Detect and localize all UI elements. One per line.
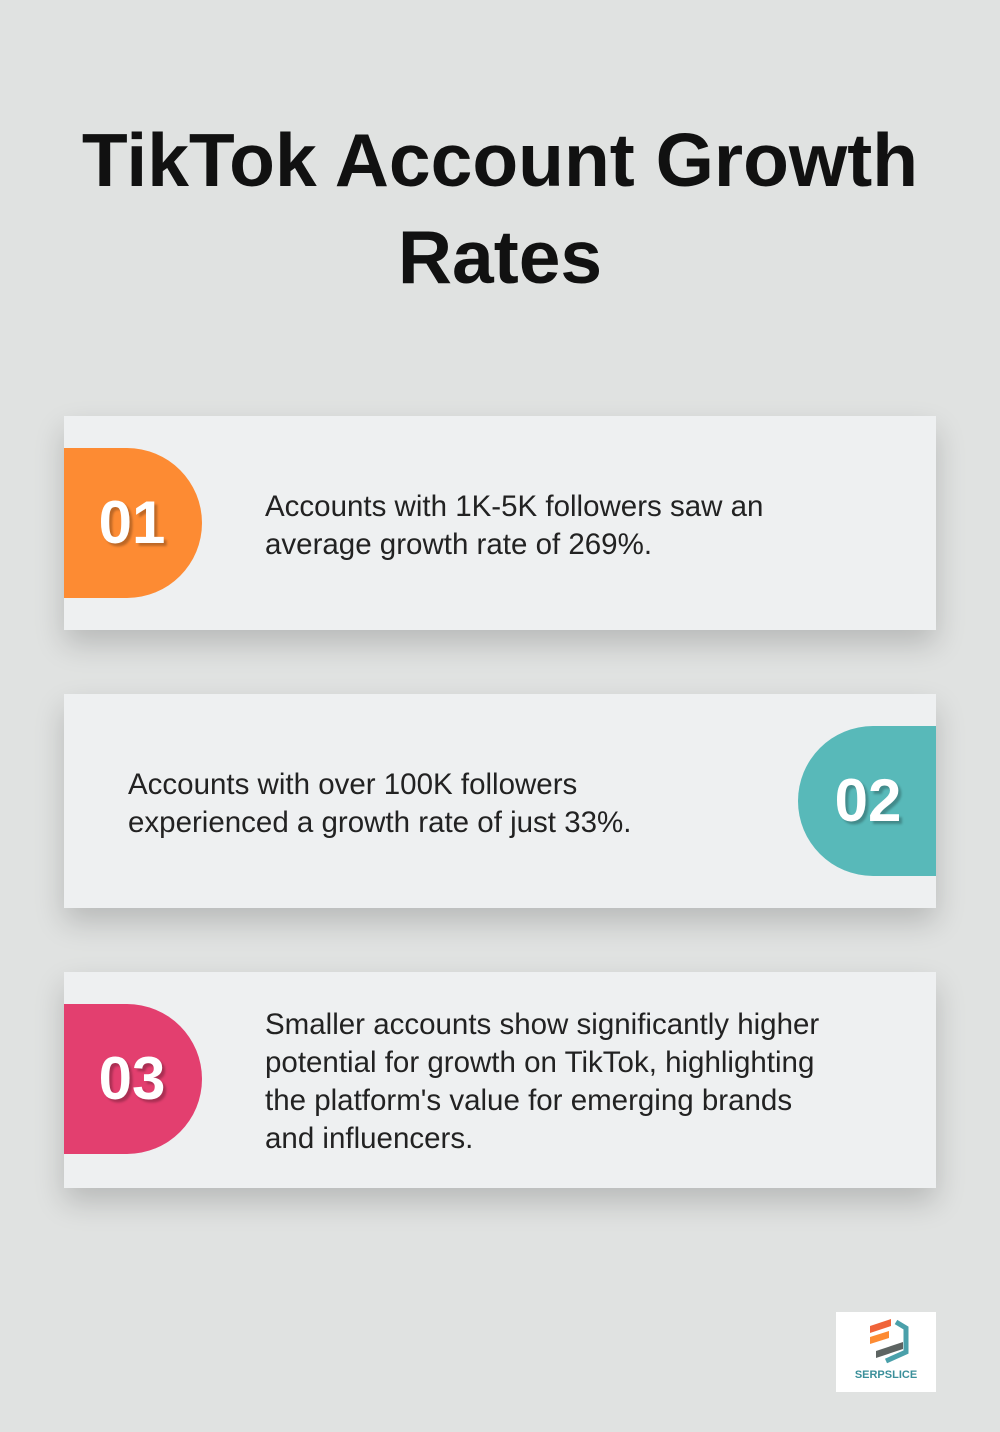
text 2: Accounts with over 100K followers experienced a growth rate of just 33%. [128, 768, 631, 839]
text 1: Accounts with 1K-5K followers saw an average growth rate of 269%. [265, 490, 763, 561]
panel: card 1 [64, 416, 936, 630]
title: Rates [398, 215, 602, 299]
text 3: Smaller accounts show significantly higher potential for growth on TikTok, highlighting the platform's value for emerging brands and influencers. [265, 1008, 819, 1155]
logo: SERPSLICE [855, 1369, 917, 1381]
badge 02: 02 [835, 767, 901, 834]
badge 02 [798, 726, 936, 876]
title: TikTok Account Growth [82, 118, 918, 202]
badge 01 [64, 448, 202, 598]
logo [836, 1312, 936, 1392]
panel: card 3 [64, 972, 936, 1188]
badge 01: 01 [99, 489, 165, 556]
badge 03 [64, 1004, 202, 1154]
badge 03: 03 [99, 1045, 165, 1112]
title [82, 118, 918, 299]
panel: card 2 [64, 694, 936, 908]
